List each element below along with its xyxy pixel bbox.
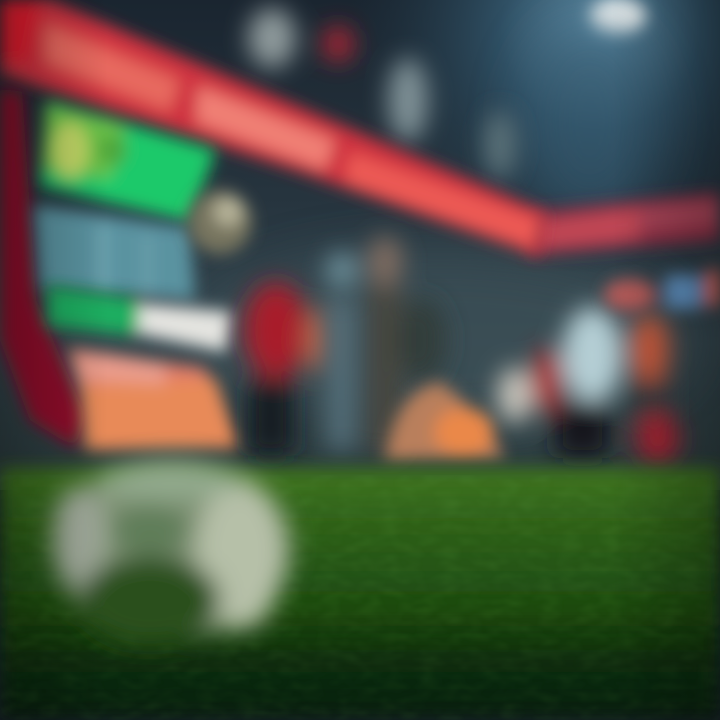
right red banner	[530, 192, 720, 256]
salmon and orange lower panels	[68, 348, 240, 450]
right group of players	[497, 307, 680, 464]
small airborne ball	[188, 190, 252, 254]
foreground football	[52, 458, 292, 644]
teal scoreboard panel	[34, 205, 195, 300]
orange player on ground	[385, 382, 505, 460]
coloured flags on the right	[604, 270, 720, 311]
main red banner	[0, 0, 545, 256]
background floodlights and top figures	[248, 8, 516, 179]
stadium background	[0, 0, 720, 490]
pitch grass	[0, 468, 720, 720]
green screen	[40, 100, 216, 222]
left red post	[0, 88, 85, 448]
player in red	[244, 282, 332, 456]
green and white score bars	[47, 285, 232, 352]
central players	[326, 236, 446, 455]
